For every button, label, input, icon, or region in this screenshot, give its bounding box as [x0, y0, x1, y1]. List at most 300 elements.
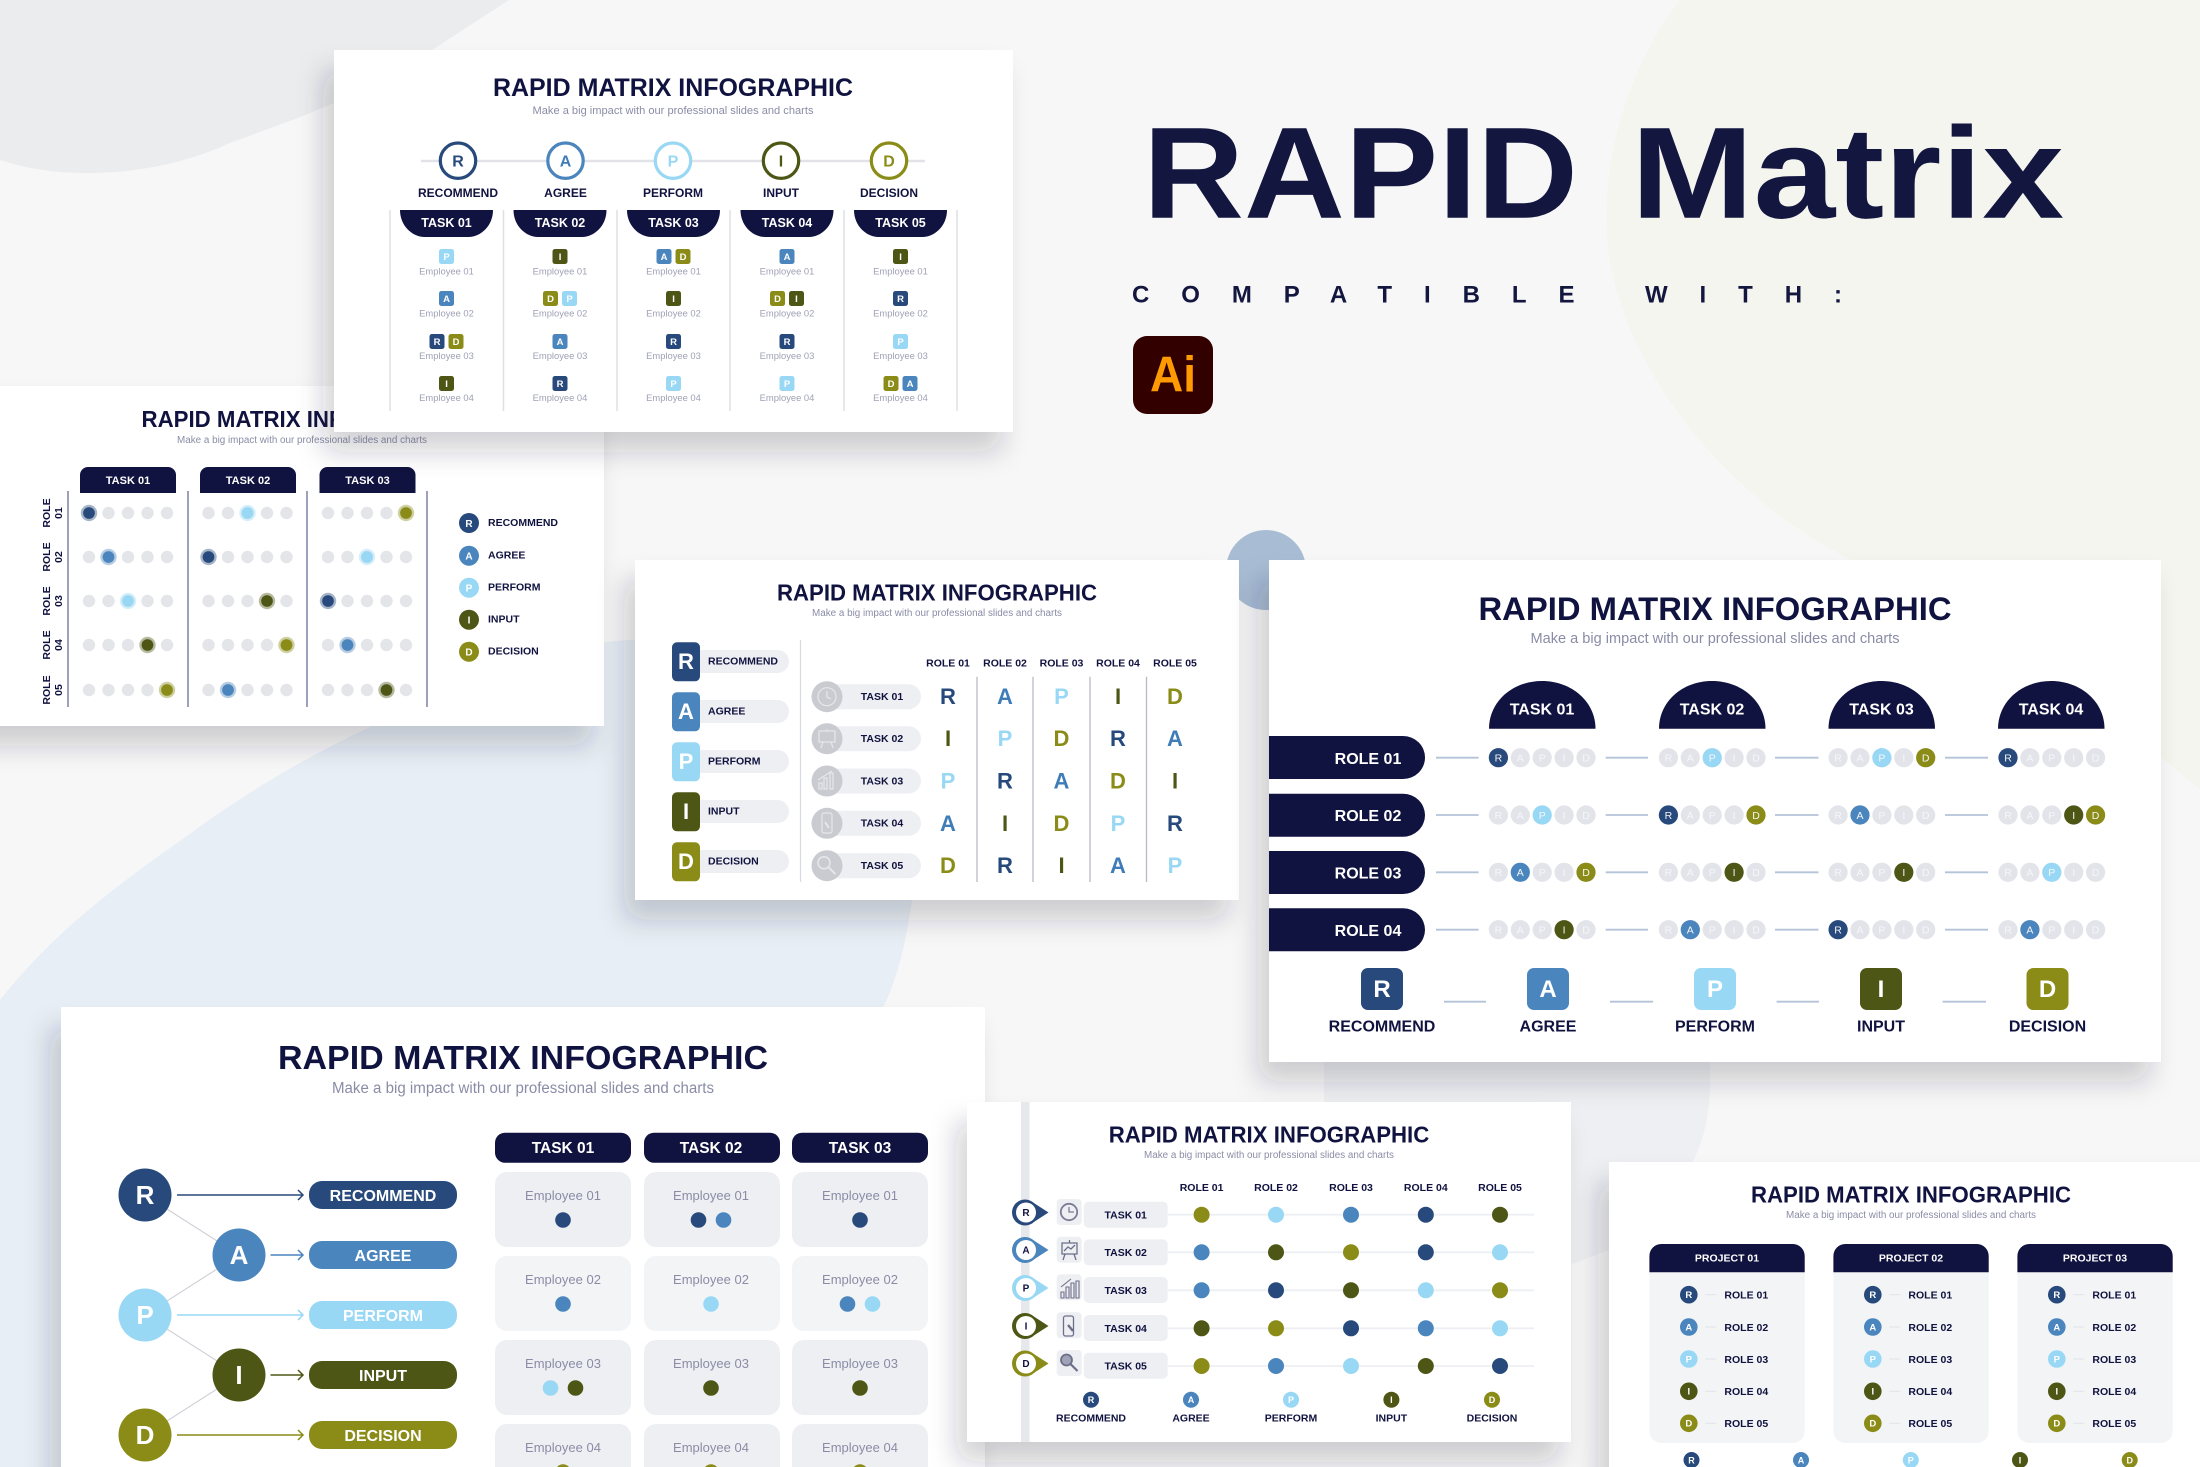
task headers: TASK 02 — [226, 475, 270, 487]
role labels: 03 — [53, 595, 65, 607]
card: project 02: R — [1869, 1290, 1876, 1301]
subtitle: Make a big impact with our professional slides and charts — [177, 435, 427, 446]
RAPID header row: INPUT — [763, 186, 800, 200]
legend: AGREE — [1172, 1412, 1210, 1424]
bottom legend: AGREE — [1520, 1019, 1577, 1036]
legend circles (cropped): A — [1798, 1455, 1805, 1465]
employee cards: Employee 01 — [673, 1188, 749, 1203]
column: task 04: Employee 01 — [760, 266, 814, 276]
card: project 02: ROLE 03 — [1908, 1354, 1952, 1366]
title: RAPID MATRIX INFOGRAPHIC — [1751, 1182, 2071, 1208]
card: project 01: ROLE 01 — [1724, 1290, 1768, 1302]
role headers: ROLE 01 — [1180, 1182, 1224, 1194]
letter grid: I — [1058, 853, 1065, 878]
task headers — [80, 467, 416, 493]
employee cards: Employee 04 — [525, 1440, 601, 1455]
task labels with icons: TASK 02 — [1104, 1247, 1147, 1259]
bottom legend: DECISION — [2009, 1019, 2086, 1036]
legend: R — [678, 649, 694, 674]
bottom legend: PERFORM — [1675, 1019, 1755, 1036]
legend — [459, 513, 558, 662]
card: project 02: PROJECT 02 — [1879, 1253, 1943, 1265]
card: project 02 — [1833, 1244, 1989, 1443]
legend: DECISION — [1467, 1412, 1517, 1424]
legend: P — [466, 584, 473, 595]
column rules — [68, 491, 427, 707]
card: project 01: ROLE 03 — [1724, 1354, 1768, 1366]
legend: RECOMMEND — [488, 517, 558, 529]
legend: P — [1288, 1395, 1294, 1405]
compatible with label: COMPATIBLE WITH: — [1132, 282, 1842, 309]
letter grid: D — [1054, 811, 1069, 836]
column: task 02: Employee 04 — [533, 392, 587, 403]
task headers: TASK 03 — [345, 475, 390, 487]
column: task 01: P — [443, 252, 450, 263]
legend: D — [1489, 1395, 1496, 1405]
column: task 02: D — [547, 294, 554, 305]
letter grid: R — [940, 684, 956, 709]
task labels with icons: TASK 03 — [1104, 1285, 1147, 1297]
card: project 03: D — [2053, 1419, 2060, 1430]
pins — [1012, 1200, 1048, 1376]
chain circles: I — [235, 1360, 243, 1390]
task labels with icons: TASK 05 — [1104, 1361, 1147, 1373]
panel: RAPID chain with employee cards — [61, 1007, 985, 1467]
grey RAPID dots — [1498, 758, 2096, 930]
card: project 03: ROLE 01 — [2092, 1290, 2136, 1302]
card: project 03 — [2017, 1244, 2173, 1443]
legend: RECOMMEND — [1056, 1412, 1126, 1424]
role headers: ROLE 03 — [1329, 1182, 1373, 1194]
hero title: RAPID — [1143, 100, 1578, 246]
employee cards: Employee 04 — [822, 1440, 898, 1455]
letter grid: P — [1168, 853, 1182, 878]
role headers — [926, 658, 1197, 670]
bottom legend: D — [2039, 976, 2056, 1003]
dot matrix — [1194, 1207, 1508, 1374]
card: project 03: R — [2053, 1290, 2060, 1301]
card: project 03: ROLE 05 — [2092, 1418, 2136, 1430]
letter grid: D — [1054, 726, 1069, 751]
role labels: 02 — [53, 551, 65, 563]
task labels with icons: TASK 04 — [1104, 1323, 1147, 1335]
pins: P — [1023, 1284, 1030, 1294]
panel: project cards — [1609, 1162, 2200, 1467]
role labels: 01 — [53, 507, 65, 519]
divider — [800, 640, 802, 882]
column: task 04: Employee 03 — [760, 350, 814, 361]
letter grid: P — [1054, 684, 1069, 709]
RAPID header row: PERFORM — [643, 186, 703, 200]
role headers: ROLE 01 — [926, 658, 970, 670]
RAPID header row: D — [883, 154, 895, 170]
letter grid: R — [1110, 726, 1126, 751]
task rows: TASK 05 — [861, 860, 903, 872]
role pills — [309, 1181, 457, 1449]
task domes: TASK 02 — [1680, 702, 1744, 719]
active dots — [81, 505, 414, 698]
column: task 05: I — [899, 252, 902, 263]
legend — [1056, 1392, 1517, 1424]
role labels: 05 — [53, 684, 65, 696]
card: project 03: P — [2054, 1354, 2061, 1365]
RAPID letters in dots: RAPID — [1495, 867, 1590, 879]
task headers: TASK 01 — [106, 475, 150, 487]
chain circles: D — [136, 1420, 154, 1450]
employee cards: Employee 01 — [822, 1188, 898, 1203]
column: task 05: Employee 01 — [873, 266, 928, 276]
task labels with icons — [1057, 1199, 1168, 1379]
RAPID header row: I — [779, 154, 783, 170]
role labels: ROLE — [41, 498, 53, 528]
card: project 02: P — [1870, 1354, 1877, 1365]
column: task 04: D — [774, 294, 781, 305]
role pills: PERFORM — [343, 1308, 423, 1325]
column: task 02: I — [559, 252, 561, 263]
role pills: ROLE 03 — [1335, 866, 1401, 882]
letter grid: D — [1167, 684, 1183, 709]
decorative circle — [1226, 530, 1306, 610]
column: task 02: Employee 03 — [533, 350, 587, 361]
grey dots grid — [89, 513, 406, 690]
task headers — [495, 1133, 928, 1163]
legend: DECISION — [708, 856, 759, 868]
subtitle: Make a big impact with our professional slides and charts — [532, 105, 814, 117]
column: task 03: A — [661, 252, 668, 263]
column: task 05: TASK 05 — [875, 216, 926, 230]
employee cards: Employee 02 — [822, 1272, 898, 1287]
chain connectors — [145, 1195, 239, 1435]
role labels: 04 — [53, 639, 65, 651]
role headers: ROLE 05 — [1478, 1182, 1522, 1194]
role pills: ROLE 01 — [1335, 751, 1401, 768]
role labels: ROLE — [41, 675, 53, 705]
icon: Adobe Illustrator: Ai — [1150, 347, 1196, 403]
column: task 03: Employee 01 — [646, 266, 701, 276]
role labels: ROLE — [41, 630, 53, 660]
legend: I — [1390, 1395, 1393, 1405]
column: task 05: Employee 03 — [873, 350, 928, 361]
column: task 03: TASK 03 — [648, 216, 699, 230]
card: project 01: I — [1687, 1387, 1690, 1398]
role headers: ROLE 04 — [1096, 658, 1140, 670]
RAPID letters in dots: RAPID — [1665, 810, 1760, 822]
RAPID letters in dots: RAPID — [1834, 867, 1930, 879]
hero title — [1143, 100, 2064, 246]
letter grid: I — [1002, 811, 1008, 836]
letter grid: P — [1111, 811, 1125, 836]
role labels: ROLE — [41, 586, 53, 616]
role pills: RECOMMEND — [330, 1188, 436, 1205]
column: task 03: Employee 02 — [646, 308, 701, 318]
column: task 04: R — [784, 337, 791, 348]
letter grid: A — [997, 684, 1013, 709]
column: task 04: P — [784, 379, 791, 390]
employee cards: Employee 03 — [822, 1356, 898, 1371]
connectors — [1436, 758, 1988, 930]
icon: Adobe Illustrator — [1133, 336, 1213, 414]
subtitle: Make a big impact with our professional slides and charts — [332, 1080, 714, 1097]
column: task 01: D — [453, 337, 460, 348]
task rows: TASK 04 — [861, 818, 903, 830]
RAPID letters in dots: RAPID — [2004, 924, 2100, 936]
column: task 04 — [740, 210, 834, 403]
task rows — [812, 681, 921, 881]
role pills: ROLE 02 — [1335, 808, 1401, 825]
task rows: TASK 03 — [861, 775, 903, 787]
bottom legend: A — [1539, 976, 1557, 1003]
task rows: TASK 01 — [861, 691, 903, 703]
card: project 02: ROLE 05 — [1908, 1418, 1952, 1430]
RAPID letters in dots: RAPID — [1495, 752, 1590, 764]
task domes: TASK 04 — [2019, 702, 2083, 719]
legend circles (cropped): I — [2019, 1455, 2021, 1465]
title: RAPID MATRIX INFOGRAPHIC — [1109, 1122, 1429, 1148]
RAPID letters in dots: RAPID — [1834, 810, 1930, 822]
legend: PERFORM — [1265, 1412, 1318, 1424]
card: project 01: ROLE 02 — [1724, 1322, 1768, 1334]
bottom legend — [1329, 968, 2086, 1036]
letter grid: A — [1167, 726, 1183, 751]
column: task 02: Employee 02 — [533, 308, 587, 318]
title: RAPID MATRIX INFOGRAPHIC — [142, 406, 462, 432]
bottom legend: R — [1373, 976, 1391, 1003]
column: task 01: TASK 01 — [421, 216, 472, 230]
card: project 02: ROLE 01 — [1908, 1290, 1952, 1302]
legend circles (cropped) — [1684, 1452, 2138, 1467]
hero title: Matrix — [1631, 100, 2064, 246]
letter grid: P — [998, 726, 1012, 751]
card: project 01: A — [1685, 1322, 1692, 1333]
role headers: ROLE 05 — [1153, 658, 1197, 670]
card: project 02: A — [1869, 1322, 1876, 1333]
RAPID header row: R — [452, 154, 464, 170]
role labels — [41, 498, 65, 705]
RAPID header row: P — [668, 154, 679, 170]
legend: INPUT — [1376, 1412, 1408, 1424]
RAPID letters in dots: RAPID — [1665, 752, 1760, 764]
task domes: TASK 03 — [1849, 702, 1914, 719]
legend: I — [683, 799, 689, 824]
letter grid: I — [945, 726, 951, 751]
letter grid: A — [940, 811, 956, 836]
legend: PERFORM — [488, 582, 541, 594]
bottom legend: P — [1707, 976, 1723, 1003]
card: project 02: I — [1871, 1387, 1874, 1398]
RAPID letters in dots: RAPID — [2004, 867, 2100, 879]
column: task 05: P — [897, 337, 904, 348]
task domes — [1489, 681, 2104, 729]
legend: PERFORM — [708, 756, 761, 768]
role labels: ROLE — [41, 542, 53, 572]
card: project 01: PROJECT 01 — [1695, 1253, 1759, 1265]
column: task 01: Employee 04 — [419, 392, 474, 403]
card: project 02: ROLE 04 — [1908, 1386, 1952, 1398]
column: task 01: I — [445, 379, 448, 390]
RAPID header row: A — [560, 154, 572, 170]
role headers: ROLE 04 — [1404, 1182, 1448, 1194]
subtitle: Make a big impact with our professional slides and charts — [812, 608, 1062, 619]
column: task 04: A — [784, 252, 791, 263]
legend: AGREE — [708, 706, 745, 718]
employee cards: Employee 02 — [525, 1272, 601, 1287]
letter grid: D — [940, 853, 956, 878]
legend circles (cropped): R — [1688, 1455, 1695, 1465]
legend: D — [678, 849, 694, 874]
role headers — [1180, 1182, 1522, 1194]
card: project 01: R — [1685, 1290, 1692, 1301]
column: task 03: Employee 04 — [646, 392, 701, 403]
RAPID letters in dots: RAPID — [1665, 924, 1760, 936]
legend: RECOMMEND — [708, 656, 778, 668]
task domes: TASK 01 — [1510, 702, 1574, 719]
card: project 02: ROLE 02 — [1908, 1322, 1952, 1334]
legend: INPUT — [488, 614, 520, 626]
role pills: ROLE 04 — [1335, 923, 1401, 940]
letter grid: A — [1110, 853, 1126, 878]
column: task 03: P — [670, 379, 677, 390]
chain circles: R — [136, 1180, 155, 1210]
arrows — [177, 1190, 303, 1440]
legend circles (cropped): P — [1908, 1455, 1914, 1465]
bottom legend: I — [1878, 976, 1884, 1003]
column: task 02 — [514, 210, 606, 403]
column: task 02: Employee 01 — [533, 266, 587, 276]
column: task 03: R — [670, 337, 677, 348]
employee cards: Employee 03 — [673, 1356, 749, 1371]
task headers: TASK 01 — [532, 1140, 595, 1157]
legend — [672, 642, 789, 881]
legend: I — [468, 616, 471, 627]
letter grid: I — [1172, 768, 1178, 794]
legend: A — [1188, 1395, 1195, 1405]
bottom legend: INPUT — [1857, 1019, 1905, 1036]
RAPID letters in dots: RAPID — [1834, 752, 1930, 764]
title: RAPID MATRIX INFOGRAPHIC — [1478, 591, 1952, 627]
column: task 05: R — [897, 294, 904, 305]
legend: P — [679, 749, 693, 774]
chain circles: P — [136, 1300, 154, 1330]
legend: R — [465, 519, 473, 530]
panel: pin rows with dots — [967, 1102, 1571, 1442]
column: task 03: I — [672, 294, 675, 305]
column: task 02: P — [566, 294, 573, 305]
column rules — [977, 677, 1146, 882]
card: project 01: ROLE 04 — [1724, 1386, 1768, 1398]
column: task 05: D — [888, 379, 895, 390]
RAPID letters in dots: RAPID — [1665, 867, 1760, 879]
column rules — [390, 210, 957, 411]
task headers: TASK 02 — [680, 1140, 742, 1157]
column: task 01: Employee 02 — [419, 308, 474, 318]
card: project 01 — [1649, 1244, 1805, 1443]
employee cards — [495, 1172, 928, 1467]
column: task 04: I — [795, 294, 798, 305]
column: task 01 — [400, 210, 493, 403]
letter grid: I — [1115, 684, 1121, 709]
letter grid: R — [1167, 811, 1183, 836]
employee cards: Employee 01 — [525, 1188, 601, 1203]
role pills — [1269, 736, 1425, 951]
RAPID letters in dots — [1495, 752, 2100, 936]
chain circles — [118, 1168, 266, 1462]
letter grid — [940, 684, 1183, 878]
letter grid: R — [997, 768, 1013, 794]
card: project 03: ROLE 04 — [2092, 1386, 2136, 1398]
task labels with icons: TASK 01 — [1104, 1209, 1147, 1221]
card: project 01: P — [1686, 1354, 1693, 1365]
panel: role and task RAPID rows — [1269, 560, 2161, 1062]
card: project 03: PROJECT 03 — [2063, 1253, 2127, 1265]
RAPID header row: RECOMMEND — [418, 186, 498, 200]
column: task 01: Employee 01 — [419, 266, 474, 276]
role headers: ROLE 02 — [983, 658, 1027, 670]
legend: A — [678, 699, 694, 724]
title: RAPID MATRIX INFOGRAPHIC — [278, 1039, 768, 1076]
employee cards: Employee 03 — [525, 1356, 601, 1371]
card: project 03: A — [2053, 1322, 2060, 1333]
card: project 01: ROLE 05 — [1724, 1418, 1768, 1430]
vertical bar — [1021, 1102, 1030, 1442]
RAPID header row: AGREE — [544, 186, 587, 200]
panel: task columns with employee badges — [334, 50, 1013, 432]
legend: D — [465, 648, 473, 659]
chain circles: A — [230, 1240, 249, 1270]
column: task 03: D — [680, 252, 687, 263]
column: task 02: R — [557, 379, 564, 390]
panel: dot matrix — [0, 386, 604, 726]
card: project 03: I — [2055, 1387, 2058, 1398]
subtitle: Make a big impact with our professional slides and charts — [1144, 1150, 1394, 1161]
RAPID letters in dots: RAPID — [1495, 924, 1590, 936]
column: task 05: A — [907, 379, 914, 390]
panel: letter matrix — [635, 560, 1239, 900]
role headers: ROLE 03 — [1040, 658, 1084, 670]
RAPID header row: DECISION — [860, 186, 918, 200]
employee cards: Employee 02 — [673, 1272, 749, 1287]
column: task 01: Employee 03 — [419, 350, 474, 361]
employee cards: Employee 04 — [673, 1440, 749, 1455]
column: task 04: Employee 04 — [760, 392, 814, 403]
row lines — [1168, 1215, 1534, 1366]
column: task 02: TASK 02 — [535, 216, 585, 230]
role pills: DECISION — [344, 1428, 422, 1445]
RAPID letters in dots: RAPID — [1834, 924, 1930, 936]
column: task 04: TASK 04 — [762, 216, 812, 230]
letter grid: D — [1110, 768, 1126, 794]
card: project 02: D — [1869, 1419, 1876, 1430]
RAPID letters in dots: RAPID — [1495, 810, 1590, 822]
task rows: TASK 02 — [861, 733, 903, 745]
legend: A — [465, 552, 473, 563]
letter grid: R — [997, 853, 1013, 878]
pins: A — [1022, 1246, 1030, 1256]
task headers: TASK 03 — [829, 1140, 892, 1157]
pins: R — [1022, 1208, 1030, 1219]
legend circles (cropped): D — [2126, 1455, 2133, 1465]
column: task 02: A — [557, 337, 564, 348]
title: RAPID MATRIX INFOGRAPHIC — [777, 580, 1097, 606]
role pills: INPUT — [359, 1368, 407, 1385]
bottom legend: RECOMMEND — [1329, 1019, 1435, 1036]
RAPID letters in dots: RAPID — [2004, 810, 2100, 822]
active RAPID dots — [1489, 748, 2105, 939]
legend: AGREE — [488, 550, 525, 562]
card: project 01: D — [1685, 1419, 1692, 1430]
pins: D — [1022, 1359, 1030, 1370]
title: RAPID MATRIX INFOGRAPHIC — [493, 74, 853, 102]
legend: R — [1088, 1395, 1095, 1405]
